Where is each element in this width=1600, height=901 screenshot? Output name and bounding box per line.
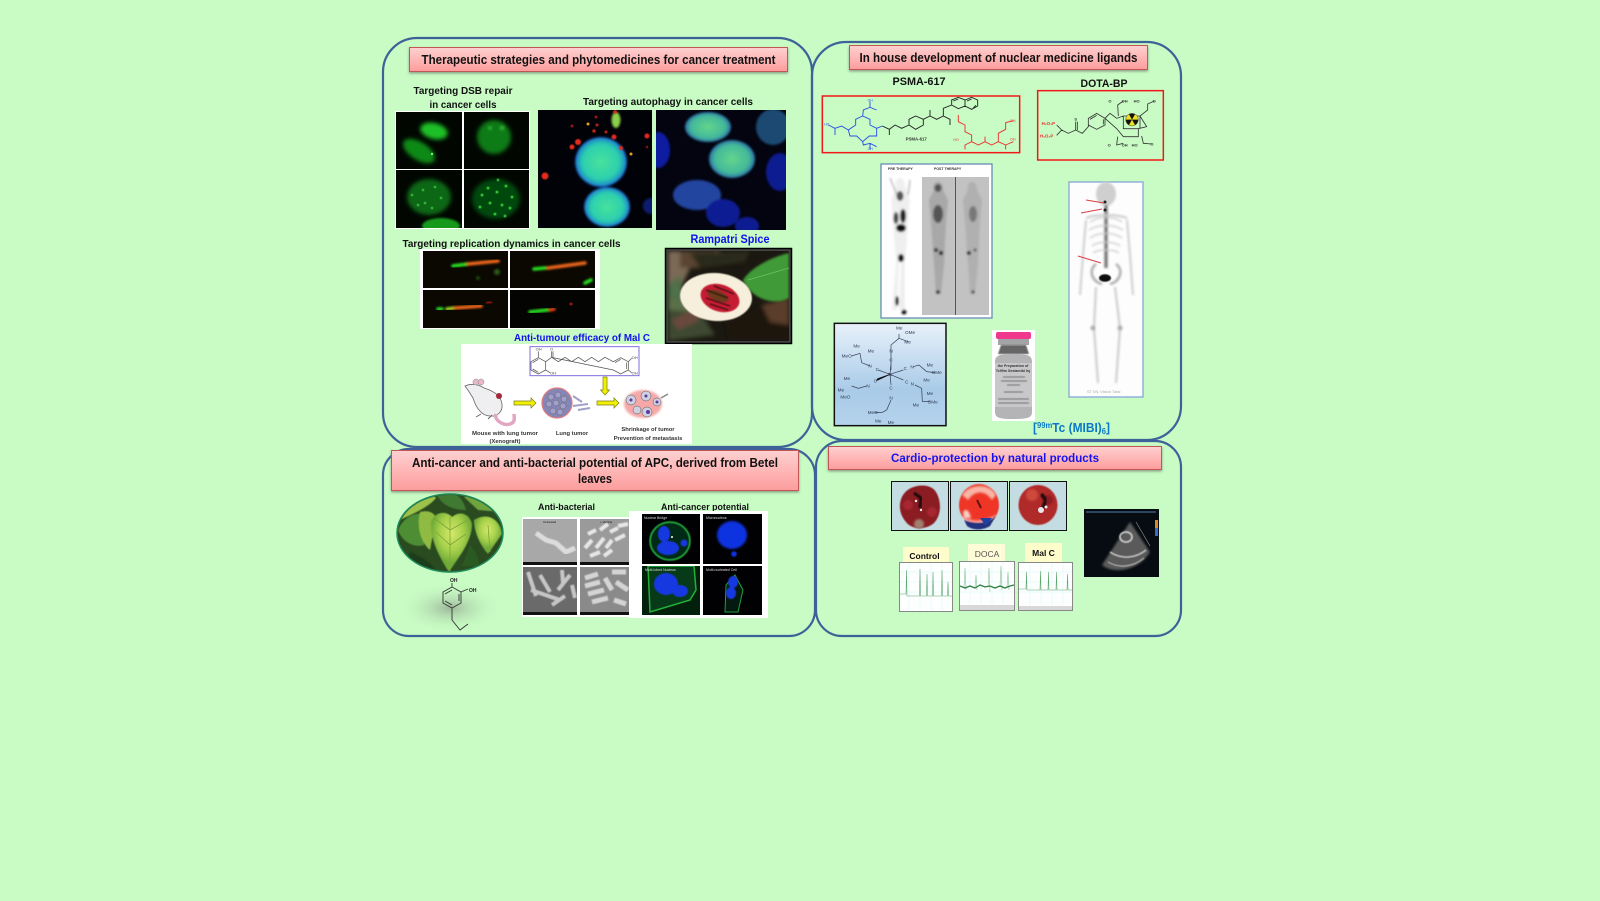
structure: DOTA-BP: HO (1132, 142, 1138, 147)
photo: radiopharmaceutical vial: the Preparation of (998, 364, 1029, 368)
structure: PSMA-617: OH (1010, 119, 1016, 123)
arrow: structure to shrinkage (600, 377, 610, 395)
caption: lung tumor: Lung tumor (556, 431, 589, 437)
caption: mouse: (Xenograft) (490, 439, 521, 445)
micrographs: SEM bacteria: + Vehicle (600, 520, 613, 524)
panel: APC from betel leaves (383, 449, 815, 636)
structure: Tc-99m sestamibi: C (889, 358, 893, 363)
heading: nuclear medicine ligands (850, 46, 1148, 70)
structure: Tc-99m sestamibi: Me (896, 325, 903, 330)
label: DOTA-BP: DOTA-BP (1080, 78, 1128, 90)
structure: DOTA-BP: O (1150, 142, 1153, 147)
structure: DOTA-BP: H₂O₃P (1042, 121, 1055, 126)
micrographs: confocal nuclei: Multi-nucleated Cell (706, 568, 737, 572)
label: targeting replication dynamics: Targeting replication dynamics in cancer cells (402, 238, 621, 250)
heading: APC from betel leaves: Anti-cancer and anti-bacterial potential of APC, derived from Betel (412, 456, 778, 470)
structure: allylpyrocatechol (443, 578, 477, 630)
structure: Tc-99m sestamibi: N (910, 364, 914, 369)
structure: allylpyrocatechol: OH (469, 588, 477, 594)
structure: Tc-99m sestamibi: C (905, 379, 909, 384)
photo: radiopharmaceutical vial: Tc99m Sestamibi Inj (996, 369, 1030, 373)
icon: shrunken tumor (624, 390, 668, 418)
structure: Tc-99m sestamibi: Me (838, 388, 845, 393)
structure: DOTA-BP: OH (1122, 143, 1128, 148)
structure: Tc-99m sestamibi: C (876, 367, 880, 372)
scan: pre and post therapy PET: PRE THERAPY (888, 167, 914, 171)
heading: APC from betel leaves: leaves (578, 472, 612, 486)
shadow behind molecule (398, 583, 502, 633)
ECG: DOCA (960, 544, 1014, 610)
structure: Tc-99m sestamibi: Me (923, 378, 930, 383)
caption: mouse: Mouse with lung tumor (472, 431, 539, 437)
structure: Tc-99m sestamibi: Me (927, 391, 934, 396)
structure: DOTA-BP (1038, 91, 1163, 160)
label: targeting DSB repair: in cancer cells (430, 99, 497, 111)
arrow: tumor to shrinkage (597, 398, 619, 408)
image: echocardiogram (1084, 509, 1159, 577)
structure: Tc-99m sestamibi: Me (853, 344, 860, 349)
structure: DOTA-BP: S (1074, 117, 1077, 122)
structure box: Mal C: OH (536, 347, 542, 352)
photo: betel leaves (397, 491, 503, 572)
structure: DOTA-BP: HO (1134, 99, 1140, 104)
ECG: DOCA: DOCA (975, 549, 1000, 559)
arrow: mouse to tumor (514, 398, 536, 408)
structure: Tc-99m sestamibi: Me (913, 403, 920, 408)
structure: Tc-99m sestamibi: Me (888, 420, 895, 425)
label: anti-cancer potential: Anti-cancer potential (661, 502, 749, 513)
structure: Tc-99m sestamibi: Me (844, 376, 851, 381)
micrographs: SEM bacteria: Untreated (543, 520, 557, 524)
micrograph: autophagy left (538, 110, 652, 228)
scan: pre and post therapy PET: POST THERAPY (934, 167, 962, 171)
panel: therapeutic strategies (383, 38, 812, 447)
structure: allylpyrocatechol: OH (450, 578, 458, 584)
ECG: Mal C: Mal C (1032, 548, 1055, 558)
structure: Tc-99m sestamibi: OMe (905, 330, 915, 335)
structure box: Mal C: OH (632, 355, 638, 360)
label: 99mTc MIBI: ] (1106, 421, 1110, 435)
heading: cardio-protection (828, 446, 1162, 470)
structure: Tc-99m sestamibi: Tc (888, 372, 893, 377)
structure: DOTA-BP: H₂O₃P (1040, 133, 1053, 138)
label: PSMA-617: PSMA-617 (892, 76, 946, 88)
micrographs: DNA fibres (420, 249, 600, 329)
structure: PSMA-617: HO (824, 123, 830, 127)
photo: radiopharmaceutical vial (992, 330, 1035, 421)
micrographs: DSB repair grid (395, 111, 530, 234)
icon: radiation symbol (1126, 113, 1138, 126)
structure: PSMA-617: OH (868, 147, 873, 151)
panel: nuclear medicine ligands (812, 42, 1181, 440)
structure: Tc-99m sestamibi: Me (927, 363, 934, 368)
ECG: Mal C (1018, 543, 1072, 610)
heading: nuclear medicine ligands: In house development of nuclear medicine ligands (860, 51, 1138, 65)
structure box: Mal C: OH (632, 370, 638, 375)
micrographs: confocal nuclei: Multi-lobed Nucleus (645, 568, 676, 572)
structure: Tc-99m sestamibi: OMe (928, 400, 938, 405)
schematic: Mal C mechanism (461, 344, 692, 445)
photo: Rampatri spice fruit (666, 248, 792, 344)
structure: DOTA-BP: O (1108, 143, 1111, 148)
structure: Tc-99m sestamibi: N (889, 395, 893, 400)
icon: lung tumor (542, 388, 590, 418)
label: 99mTc MIBI: 6 (1102, 427, 1107, 436)
structure: PSMA-617 (822, 96, 1020, 153)
structure box: Mal C: O (550, 346, 553, 351)
heading: therapeutic strategies: Therapeutic strategies and phytomedicines for cancer treatment (422, 53, 776, 67)
structure: Tc-99m sestamibi: Me (904, 339, 911, 344)
structure: PSMA-617: OH (868, 98, 873, 102)
micrographs: confocal nuclei: Micronucleus (706, 516, 727, 520)
label: anti-bacterial: Anti-bacterial (538, 502, 595, 513)
caption: shrinkage: Prevention of metastasis (614, 436, 682, 442)
micrographs: confocal nuclei (629, 511, 768, 618)
structure: PSMA-617: HO (953, 138, 959, 142)
heading: APC from betel leaves (392, 450, 798, 490)
scan: pre and post therapy PET (881, 164, 992, 318)
icon: mouse (465, 379, 514, 424)
structure: DOTA-BP: O (1153, 99, 1156, 104)
label: 99mTc MIBI: 99m (1037, 421, 1052, 430)
scan: bone scan with arrows (1069, 182, 1143, 397)
scan: bone scan with arrows: ST WL Vision Total (1087, 389, 1121, 394)
structure box: Mal C (530, 346, 639, 376)
structure: DOTA-BP: OH (1122, 99, 1128, 104)
structure: Tc-99m sestamibi: MeO (868, 410, 878, 415)
heading: cardio-protection: Cardio-protection by natural products (891, 451, 1099, 465)
heading: therapeutic strategies (410, 48, 788, 72)
structure: Tc-99m sestamibi: N (889, 349, 893, 354)
structure: Tc-99m sestamibi: C (889, 385, 893, 390)
caption: shrinkage: Shrinkage of tumor (621, 427, 675, 433)
structure: Tc-99m sestamibi: MeO (840, 394, 851, 399)
structure: PSMA-617: PSMA-617 (906, 137, 927, 142)
label: Rampatri Spice: Rampatri Spice (690, 234, 770, 246)
photos: heart sections (891, 481, 1067, 531)
micrographs: SEM bacteria (522, 517, 630, 617)
label: 99mTc MIBI: Tc (MIBI) (1052, 421, 1102, 435)
structure: Tc-99m sestamibi: C (904, 366, 908, 371)
structure: PSMA-617: OH (1010, 138, 1016, 142)
structure: DOTA-BP: O (1108, 99, 1111, 104)
structure: Tc-99m sestamibi: N (868, 364, 872, 369)
structure: Tc-99m sestamibi: MeO (842, 354, 852, 359)
structure: Tc-99m sestamibi (834, 323, 946, 426)
ECG: control: Control (909, 551, 940, 561)
micrographs: confocal nuclei: Nuclear Bridge (644, 516, 667, 520)
micrograph: autophagy right (656, 110, 786, 230)
structure: Tc-99m sestamibi: C (874, 379, 878, 384)
label: targeting DSB repair: Targeting DSB repair (414, 85, 512, 97)
structure box: Mal C: OH (550, 370, 556, 375)
panel: cardio-protection (816, 441, 1181, 636)
structure: Tc-99m sestamibi: Me (868, 348, 875, 353)
structure: Tc-99m sestamibi: OMe (932, 370, 942, 375)
label: 99mTc MIBI: [ (1033, 421, 1037, 435)
ECG: control (900, 547, 952, 612)
label: anti-tumour efficacy: Anti-tumour efficacy of Mal C (514, 333, 650, 344)
structure: Tc-99m sestamibi: Me (875, 418, 882, 423)
structure: Tc-99m sestamibi: N (866, 384, 870, 389)
structure: Tc-99m sestamibi: N (911, 382, 914, 387)
label: targeting autophagy: Targeting autophagy in cancer cells (583, 96, 753, 108)
